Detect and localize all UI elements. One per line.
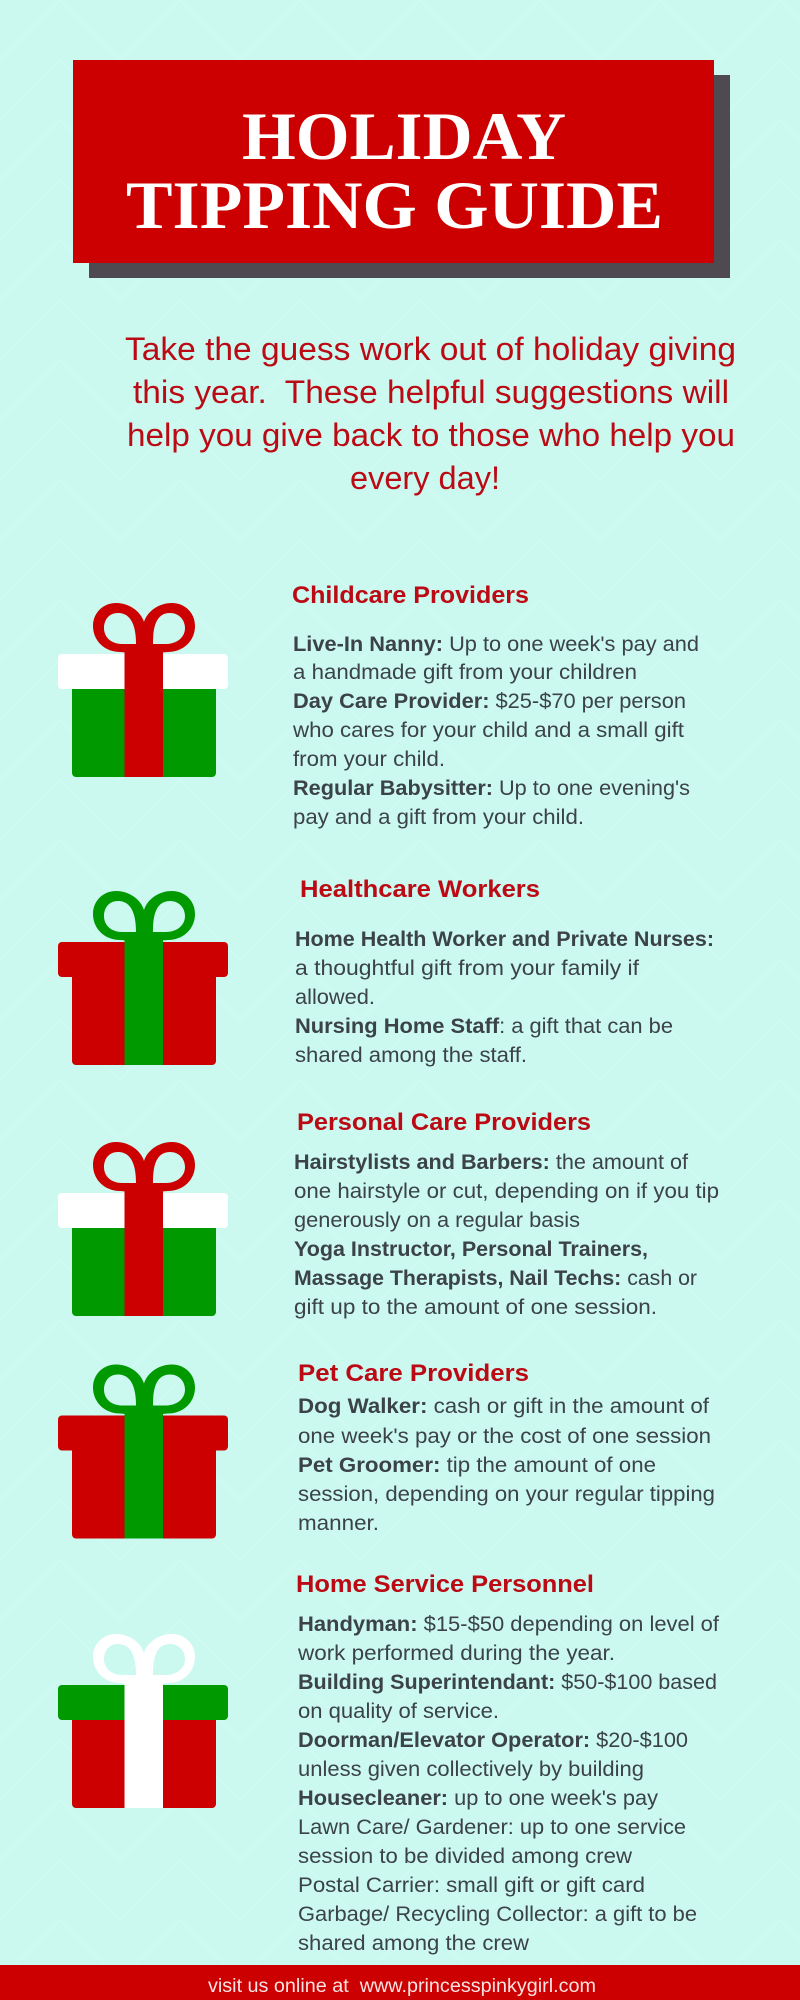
- body text: Housecleaner: up to one week's pay: [298, 1787, 659, 1810]
- body text: Live-In Nanny: Up to one week's pay and: [293, 633, 699, 656]
- body text: pay and a gift from your child.: [293, 806, 584, 829]
- body text: [297, 1613, 719, 1955]
- heading: Personal Care Providers: [297, 1109, 591, 1136]
- body text: [295, 928, 714, 1067]
- body text: on quality of service.: [298, 1700, 499, 1723]
- body text: one week's pay or the cost of one session: [298, 1425, 711, 1448]
- icon: gift red ribbon white lid: [58, 603, 228, 777]
- body text: Pet Groomer: tip the amount of one: [298, 1454, 656, 1477]
- intro text: Take the guess work out of holiday giving: [125, 331, 736, 367]
- intro text: every day!: [350, 460, 500, 496]
- heading: Childcare Providers: [292, 582, 529, 609]
- body text: Day Care Provider: $25-$70 per person: [293, 690, 686, 713]
- icon: gift white ribbon green lid: [58, 1634, 228, 1808]
- body text: Garbage/ Recycling Collector: a gift to be: [298, 1903, 697, 1926]
- panel: healthcare workers: [58, 876, 714, 1067]
- body text: work performed during the year.: [297, 1642, 615, 1665]
- body text: Dog Walker: cash or gift in the amount of: [298, 1395, 709, 1418]
- body text: Regular Babysitter: Up to one evening's: [293, 777, 690, 800]
- heading: Healthcare Workers: [300, 876, 540, 903]
- footer bar: visit us online at www.princesspinkygirl.com: [208, 1976, 596, 1997]
- body text: generously on a regular basis: [294, 1209, 580, 1232]
- body text: Handyman: $15-$50 depending on level of: [298, 1613, 719, 1636]
- body text: Building Superintendant: $50-$100 based: [298, 1671, 717, 1694]
- body text: allowed.: [295, 986, 375, 1009]
- title: TIPPING GUIDE: [126, 167, 663, 243]
- body text: Yoga Instructor, Personal Trainers,: [294, 1238, 648, 1261]
- body text: shared among the crew: [298, 1932, 530, 1955]
- body text: Hairstylists and Barbers: the amount of: [294, 1151, 688, 1174]
- body text: manner.: [298, 1512, 379, 1535]
- body text: [298, 1395, 715, 1535]
- body text: Doorman/Elevator Operator: $20-$100: [298, 1729, 688, 1752]
- intro text: this year. These helpful suggestions will: [133, 374, 729, 410]
- body text: gift up to the amount of one session.: [294, 1296, 657, 1319]
- body text: Home Health Worker and Private Nurses:: [295, 928, 714, 951]
- body text: one hairstyle or cut, depending on if you tip: [294, 1180, 719, 1203]
- body text: from your child.: [293, 748, 445, 771]
- panel: childcare providers: [58, 582, 699, 829]
- body text: [294, 1151, 719, 1319]
- body text: session, depending on your regular tipping: [298, 1483, 715, 1506]
- intro text: [125, 331, 736, 496]
- body text: a handmade gift from your children: [293, 661, 637, 684]
- icon: gift red ribbon white lid: [58, 1142, 228, 1316]
- panel: personal care providers: [58, 1109, 719, 1319]
- title: HOLIDAY: [242, 98, 566, 174]
- title banner: [73, 60, 730, 278]
- body text: unless given collectively by building: [298, 1758, 644, 1781]
- body text: [292, 633, 699, 829]
- icon: gift green ribbon red box: [58, 891, 228, 1065]
- body text: Massage Therapists, Nail Techs: cash or: [294, 1267, 697, 1290]
- heading: Pet Care Providers: [298, 1360, 529, 1387]
- body text: Postal Carrier: small gift or gift card: [298, 1874, 645, 1897]
- footer bar: [0, 1965, 800, 2000]
- title: [126, 98, 663, 243]
- panel: pet care providers: [58, 1360, 715, 1538]
- body text: a thoughtful gift from your family if: [295, 957, 639, 980]
- body text: who cares for your child and a small gift: [292, 719, 684, 742]
- heading: Home Service Personnel: [296, 1571, 594, 1598]
- intro text: help you give back to those who help you: [127, 417, 735, 453]
- body text: shared among the staff.: [295, 1044, 527, 1067]
- body text: Nursing Home Staff : a gift that can be: [295, 1015, 673, 1038]
- body text: session to be divided among crew: [298, 1845, 633, 1868]
- body text: Lawn Care/ Gardener: up to one service: [298, 1816, 686, 1839]
- panel: home service personnel: [58, 1571, 719, 1955]
- icon: gift green ribbon red box: [58, 1364, 228, 1538]
